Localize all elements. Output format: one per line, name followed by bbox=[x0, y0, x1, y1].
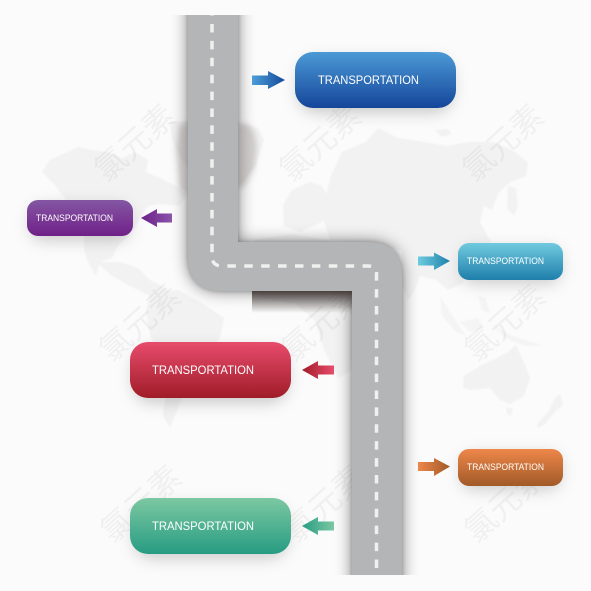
watermark bottom centre: 氯元素 bbox=[277, 458, 373, 550]
watermark top centre: 氯元素 bbox=[272, 97, 368, 189]
watermark top right: 氯元素 bbox=[455, 97, 551, 189]
watermark middle centre: 氯元素 bbox=[274, 277, 370, 369]
arrow: orange bbox=[418, 458, 450, 476]
map: Asia bbox=[322, 128, 528, 300]
red card shadow bbox=[134, 350, 287, 402]
green card bbox=[130, 498, 291, 554]
item: orange bbox=[418, 449, 563, 489]
map: Central America bbox=[96, 262, 176, 300]
arrow: red bbox=[302, 361, 334, 379]
road bbox=[176, 0, 402, 591]
arrow: blue bbox=[252, 71, 285, 89]
blue card bbox=[295, 52, 456, 108]
road centre dashes bbox=[212, 15, 376, 575]
purple card bbox=[27, 200, 133, 236]
orange card bbox=[458, 449, 563, 486]
green card label: TRANSPORTATION bbox=[152, 521, 254, 533]
red card bbox=[130, 342, 291, 398]
watermark top left: 氯元素 bbox=[87, 97, 183, 189]
map: Kamchatka bbox=[507, 186, 518, 216]
item: red bbox=[130, 342, 334, 402]
arrow: purple bbox=[141, 209, 172, 227]
orange card shadow bbox=[462, 455, 560, 489]
item: blue bbox=[252, 52, 456, 112]
map: North America bbox=[42, 147, 186, 276]
map: Europe bbox=[283, 182, 330, 232]
teal card bbox=[458, 243, 563, 280]
map: Tasmania bbox=[506, 408, 513, 416]
green card shadow bbox=[134, 506, 287, 558]
road surface bbox=[188, 15, 402, 575]
map: Indochina and islands bbox=[440, 296, 545, 346]
orange card label: TRANSPORTATION bbox=[467, 462, 544, 472]
road shadow bbox=[176, 0, 402, 591]
teal card label: TRANSPORTATION bbox=[467, 256, 544, 266]
watermark middle right: 氯元素 bbox=[457, 277, 553, 369]
item: purple bbox=[27, 200, 172, 240]
watermark bottom right: 氯元素 bbox=[457, 458, 553, 550]
map: Greenland and Arctic bbox=[170, 120, 264, 196]
map: South America bbox=[146, 290, 224, 428]
map: Arctic island bbox=[435, 129, 452, 137]
teal card shadow bbox=[462, 249, 560, 283]
arrow: teal bbox=[418, 252, 450, 270]
item: green bbox=[130, 498, 334, 558]
blue card shadow bbox=[299, 60, 452, 112]
map: Australia bbox=[463, 345, 530, 404]
map: New Zealand bbox=[537, 394, 563, 428]
watermark bottom left: 氯元素 bbox=[93, 458, 189, 550]
watermarks bbox=[87, 97, 553, 550]
red card label: TRANSPORTATION bbox=[152, 365, 254, 377]
map: Africa bbox=[246, 234, 392, 378]
item: teal bbox=[418, 243, 563, 283]
watermark middle left: 氯元素 bbox=[92, 277, 188, 369]
purple card shadow bbox=[31, 206, 129, 240]
blue card label: TRANSPORTATION bbox=[318, 75, 419, 87]
purple card label: TRANSPORTATION bbox=[36, 213, 113, 223]
world map bbox=[42, 120, 563, 428]
arrow: green bbox=[302, 517, 334, 535]
